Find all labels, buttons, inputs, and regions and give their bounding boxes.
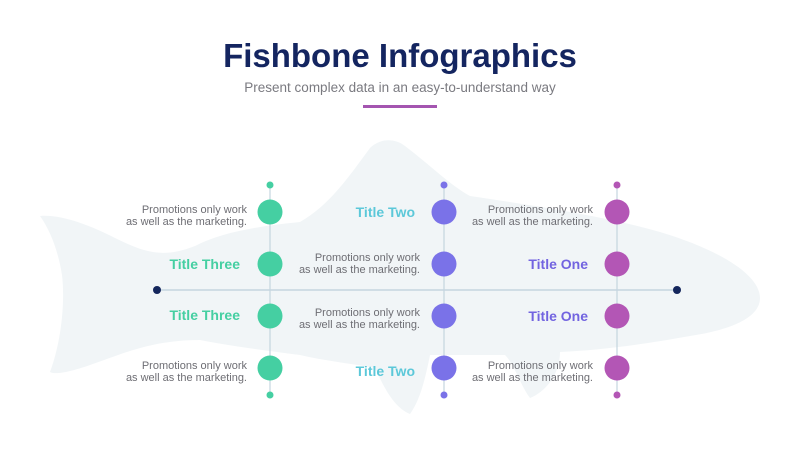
labels column 1: as well as the marketing. (126, 372, 247, 384)
labels column 2: Title Two (356, 363, 415, 379)
labels column 3: Promotions only work (488, 360, 593, 372)
spine axis (153, 286, 681, 294)
labels column 2: Promotions only work (315, 252, 420, 264)
title: Fishbone Infographics (223, 37, 577, 74)
labels column 2 (299, 204, 420, 379)
subtitle: Present complex data in an easy-to-understand way (244, 80, 556, 95)
bone: green column (258, 182, 282, 398)
bone: purple column (604, 182, 630, 398)
labels column 1 (126, 204, 247, 384)
labels column 1: Title Three (169, 256, 240, 272)
labels column 3: Title One (528, 308, 588, 324)
labels column 2: Title Two (356, 204, 415, 220)
labels column 1: Promotions only work (142, 204, 247, 216)
labels column 1: Promotions only work (142, 360, 247, 372)
labels column 2: Promotions only work (315, 307, 420, 319)
labels column 3: as well as the marketing. (472, 216, 593, 228)
labels column 1: as well as the marketing. (126, 216, 247, 228)
labels column 1: Title Three (169, 307, 240, 323)
labels column 2: as well as the marketing. (299, 264, 420, 276)
labels column 3: as well as the marketing. (472, 372, 593, 384)
labels column 3 (472, 204, 593, 384)
labels column 2: as well as the marketing. (299, 319, 420, 331)
bone: blue column (432, 182, 456, 398)
labels column 3: Promotions only work (488, 204, 593, 216)
underline accent (363, 105, 437, 108)
fish silhouette background (40, 140, 760, 414)
labels column 3: Title One (528, 256, 588, 272)
